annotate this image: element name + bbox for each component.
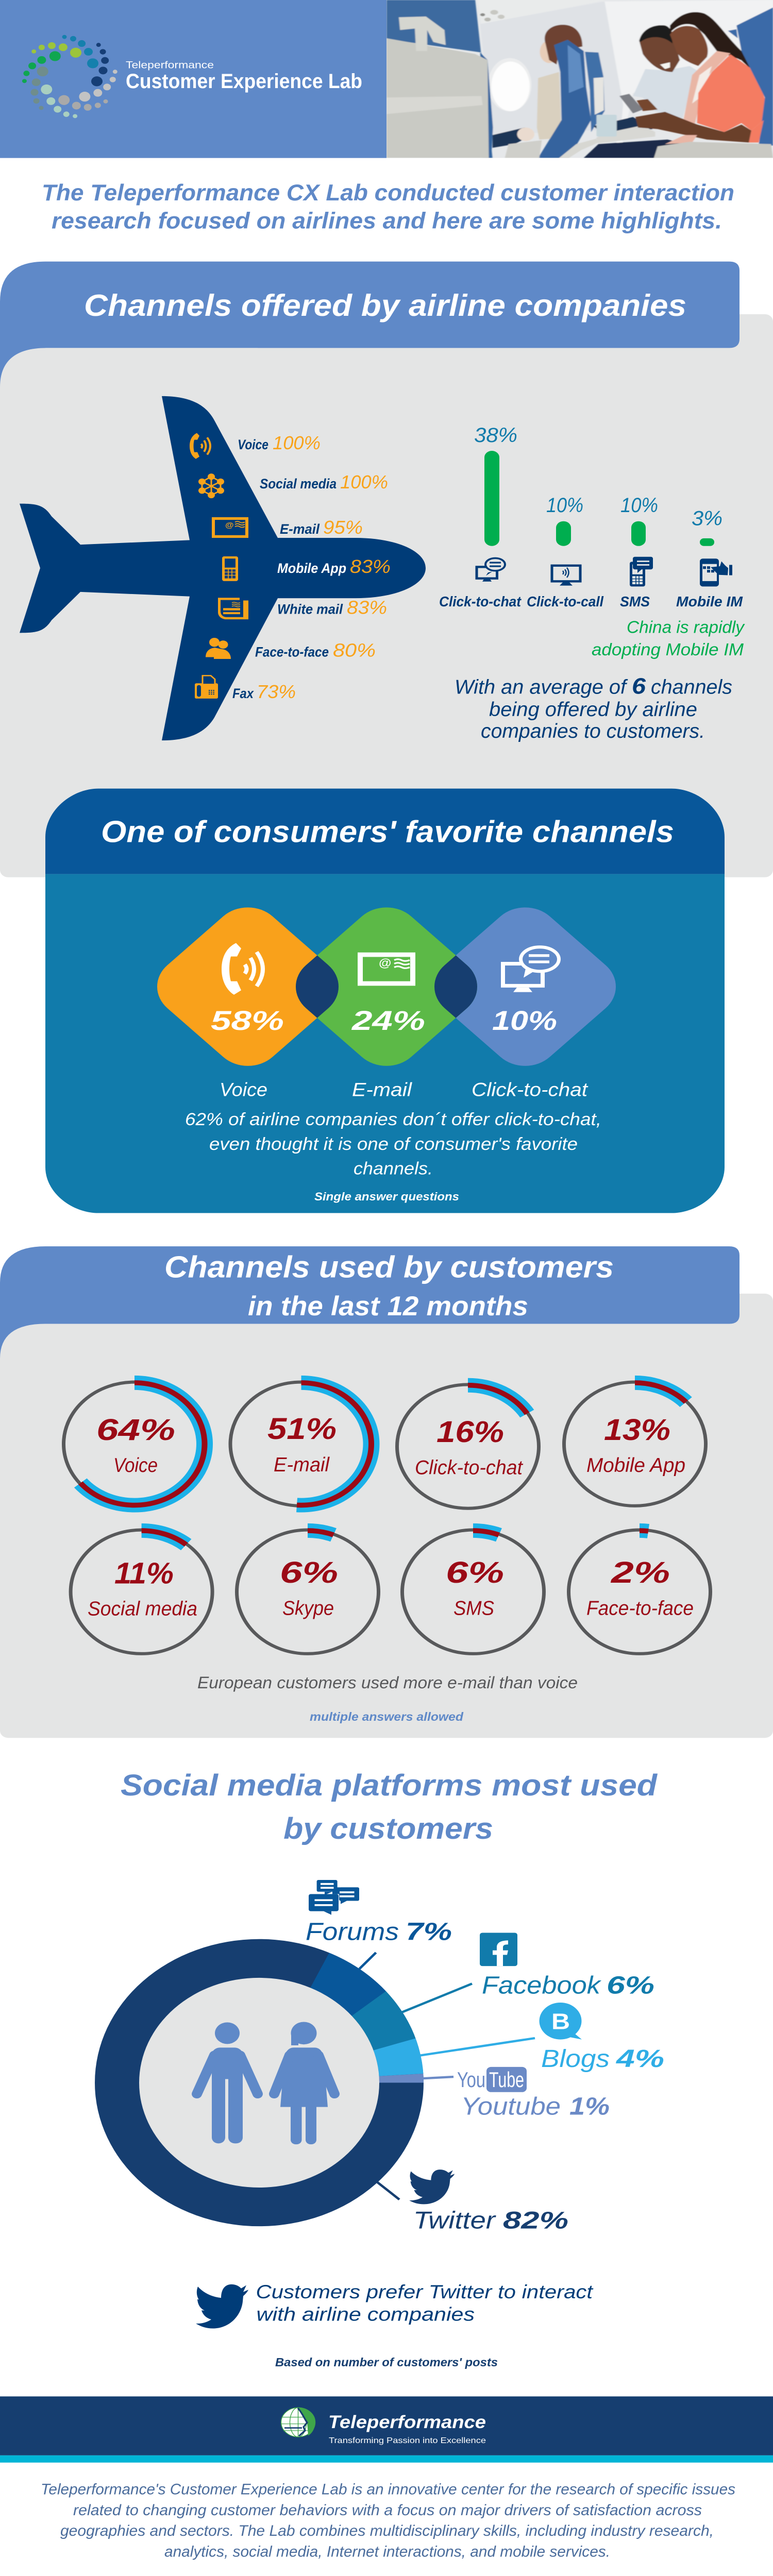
heading band: channels used: Channels used by customers [164,1250,614,1284]
callout: China mobile IM: China is rapidly [627,618,745,637]
text: average channels [455,673,732,742]
heading band: channels offered: Channels offered by airline companies [84,288,686,323]
airplane channel labels: 73% [257,682,296,702]
logo text: Customer Experience Lab [126,70,362,93]
text: note: channels. [354,1159,433,1178]
icon: chat white [503,947,559,992]
footnote: based on posts: Based on number of customers' posts [275,2356,498,2369]
bar chart: emerging channels: SMS [620,594,650,609]
bar chart: emerging channels: 38% [474,424,517,447]
diamonds [143,895,630,1078]
text: about the lab [41,2480,735,2560]
ring: click-to-chat 16% [397,1384,539,1509]
callout: China mobile IM: adopting Mobile IM [592,640,744,659]
label: twitter: 82% [503,2207,568,2234]
icon: voice white [222,943,263,995]
label: facebook: Facebook [482,1971,601,1999]
airplane channel labels: Social media [260,477,337,492]
bar chart: emerging channels: Click-to-call [527,594,604,609]
bar chart: emerging channels [439,424,743,609]
ring: skype 6% [237,1530,378,1654]
callout: China mobile IM [592,618,745,659]
panel: favorite channels [45,789,725,1213]
percentages: 10% [492,1005,557,1036]
heading: social media platforms: Social media platforms most used [121,1769,658,1802]
airplane channel labels: 100% [340,472,388,493]
airplane channel labels: E-mail [280,522,320,537]
footnote: Single answer questions [314,1191,459,1203]
text: note: 62% of airline companies don´t offer click-to-chat, [185,1109,601,1129]
label: blogs [421,2003,664,2072]
panel: channels offered [0,262,773,877]
ring: skype 6%: 6% [280,1556,338,1589]
airplane channel labels [232,433,391,702]
channel labels: Click-to-chat [472,1079,589,1100]
heading band: channels used: in the last 12 months [248,1291,528,1321]
ring: click-to-chat 16%: Click-to-chat [415,1456,523,1479]
ring: mobile app 13%: 13% [604,1413,670,1447]
label: youtube: Youtube [461,2092,561,2120]
text: about the lab: related to changing customer behaviors with a focus on major drivers of satisfaction across [73,2501,702,2519]
footer band [0,2396,773,2463]
ring: voice 64% [64,1382,205,1506]
percentages [211,1005,557,1036]
ring: mobile app 13% [564,1382,706,1506]
ring: face-to-face 2% [569,1530,710,1654]
label: facebook [402,1933,654,2012]
icon: woman [274,2022,334,2144]
icon: mobile app [222,556,238,581]
icon: mobile IM [700,558,732,586]
airplane channel labels: 83% [347,598,387,618]
icon: sms [630,557,653,586]
label: blogs: B [551,2009,570,2034]
icon: e-mail white [360,955,413,984]
bar chart: emerging channels: 3% [692,507,722,530]
icon: man [197,2022,258,2143]
label: youtube: 1% [569,2092,610,2120]
airplane channel labels: 95% [323,518,363,538]
bar chart: emerging channels: Click-to-chat [439,594,522,609]
ring: e-mail 51% [230,1382,372,1506]
ring: social media 11%: Social media [88,1598,197,1620]
bar chart: emerging channels: 10% [546,494,583,517]
text: note [185,1109,601,1178]
icon: white mail [218,598,248,619]
text: average channels: 6 [632,673,646,699]
percentages: 58% [211,1005,284,1036]
text: average channels: being offered by airline [489,699,697,720]
icon: e-mail [213,518,247,536]
logo text: Teleperformance [126,60,214,71]
icon: social media [199,474,224,498]
intro text: research focused on airlines and here are some highlights. [52,208,722,234]
icon: face-to-face [206,638,231,659]
icon: twitter bird [196,2284,248,2328]
label: blogs: 4% [616,2044,664,2072]
bar chart: emerging channels: Mobile IM [676,594,743,609]
logo: globe face [281,2408,315,2437]
intro text [42,180,734,234]
ring: sms 6%: 6% [446,1556,504,1589]
photo: passengers in an airplane cabin [386,0,773,158]
heading band: channels used [0,1246,740,1395]
label: facebook: 6% [607,1971,654,1999]
heading: favorite channels: One of consumers' favorite channels [101,815,674,849]
ring: mobile app 13%: Mobile App [586,1454,685,1476]
footnote: multiple answers: multiple answers allowed [310,1710,464,1724]
text: about the lab: analytics, social media, Internet interactions, and mobile services. [164,2543,610,2560]
footer band: Transforming Passion into Excellence [329,2436,486,2445]
channel labels: Voice [220,1079,267,1100]
airplane channel labels: White mail [277,602,343,617]
airplane channel labels: Face-to-face [255,645,329,660]
label: forums: Forums [306,1918,399,1945]
ring: sms 6% [402,1530,544,1654]
ring: skype 6%: Skype [282,1597,334,1619]
heading: social media platforms [121,1769,658,1845]
airplane channel labels: 83% [350,557,391,578]
label: youtube: You [457,2067,485,2092]
ring: click-to-chat 16%: 16% [436,1415,504,1449]
icon: e-mail: @ [225,521,234,530]
icon: voice [190,433,210,459]
panel: channels used [0,1246,773,1738]
ring: face-to-face 2%: 2% [611,1556,670,1589]
percentages: 24% [351,1005,425,1036]
label: blogs: Blogs [541,2044,610,2072]
icon: click-to-call [552,566,580,586]
heading: social media platforms: by customers [283,1812,493,1845]
text: average channels: companies to customers. [481,720,705,742]
airplane channel labels: Mobile App [277,561,346,577]
callout: twitter preference: Customers prefer Twitter to interact [256,2281,594,2302]
label: youtube [423,2067,610,2120]
airplane [20,396,426,740]
ring: sms 6%: SMS [453,1597,494,1619]
logo text [126,60,362,93]
airplane channel labels: Fax [232,686,254,702]
bar chart: emerging channels: 10% [620,494,658,517]
airplane channel labels: 80% [333,640,376,661]
ring: voice 64%: 64% [96,1413,175,1447]
donut chart [95,1939,424,2226]
ring: face-to-face 2%: Face-to-face [586,1597,694,1619]
ring: social media 11% [71,1530,212,1654]
ring: voice 64%: Voice [113,1454,158,1476]
airplane channel labels: Voice [238,437,268,452]
logo: dot swirl [22,35,117,118]
icon: e-mail white: @ [379,957,391,969]
callout: twitter preference: with airline companies [257,2304,475,2325]
airplane channel labels: 100% [273,433,321,453]
ring: e-mail 51%: 51% [267,1412,337,1446]
ring: social media 11%: 11% [114,1556,174,1590]
label: twitter: Twitter [413,2207,496,2234]
icon: click-to-chat [477,558,505,582]
channel labels: E-mail [352,1079,412,1100]
footer band: Teleperformance [328,2412,486,2432]
label: twitter [377,2170,568,2234]
text: European customers: European customers used more e-mail than voice [197,1674,578,1692]
channel labels [220,1079,589,1100]
icon: fax [195,675,218,699]
text: note: even thought it is one of consumer's favorite [209,1134,578,1154]
text: average channels: channels [651,676,732,698]
label: forums: 7% [406,1918,452,1945]
ring: e-mail 51%: E-mail [274,1454,330,1476]
heading band: channels offered [0,262,740,450]
text: average channels: With an average of [455,676,628,698]
callout: twitter preference [196,2281,594,2328]
label: youtube: Tube [489,2067,524,2092]
label: forums [306,1880,452,1969]
header banner [0,0,773,158]
